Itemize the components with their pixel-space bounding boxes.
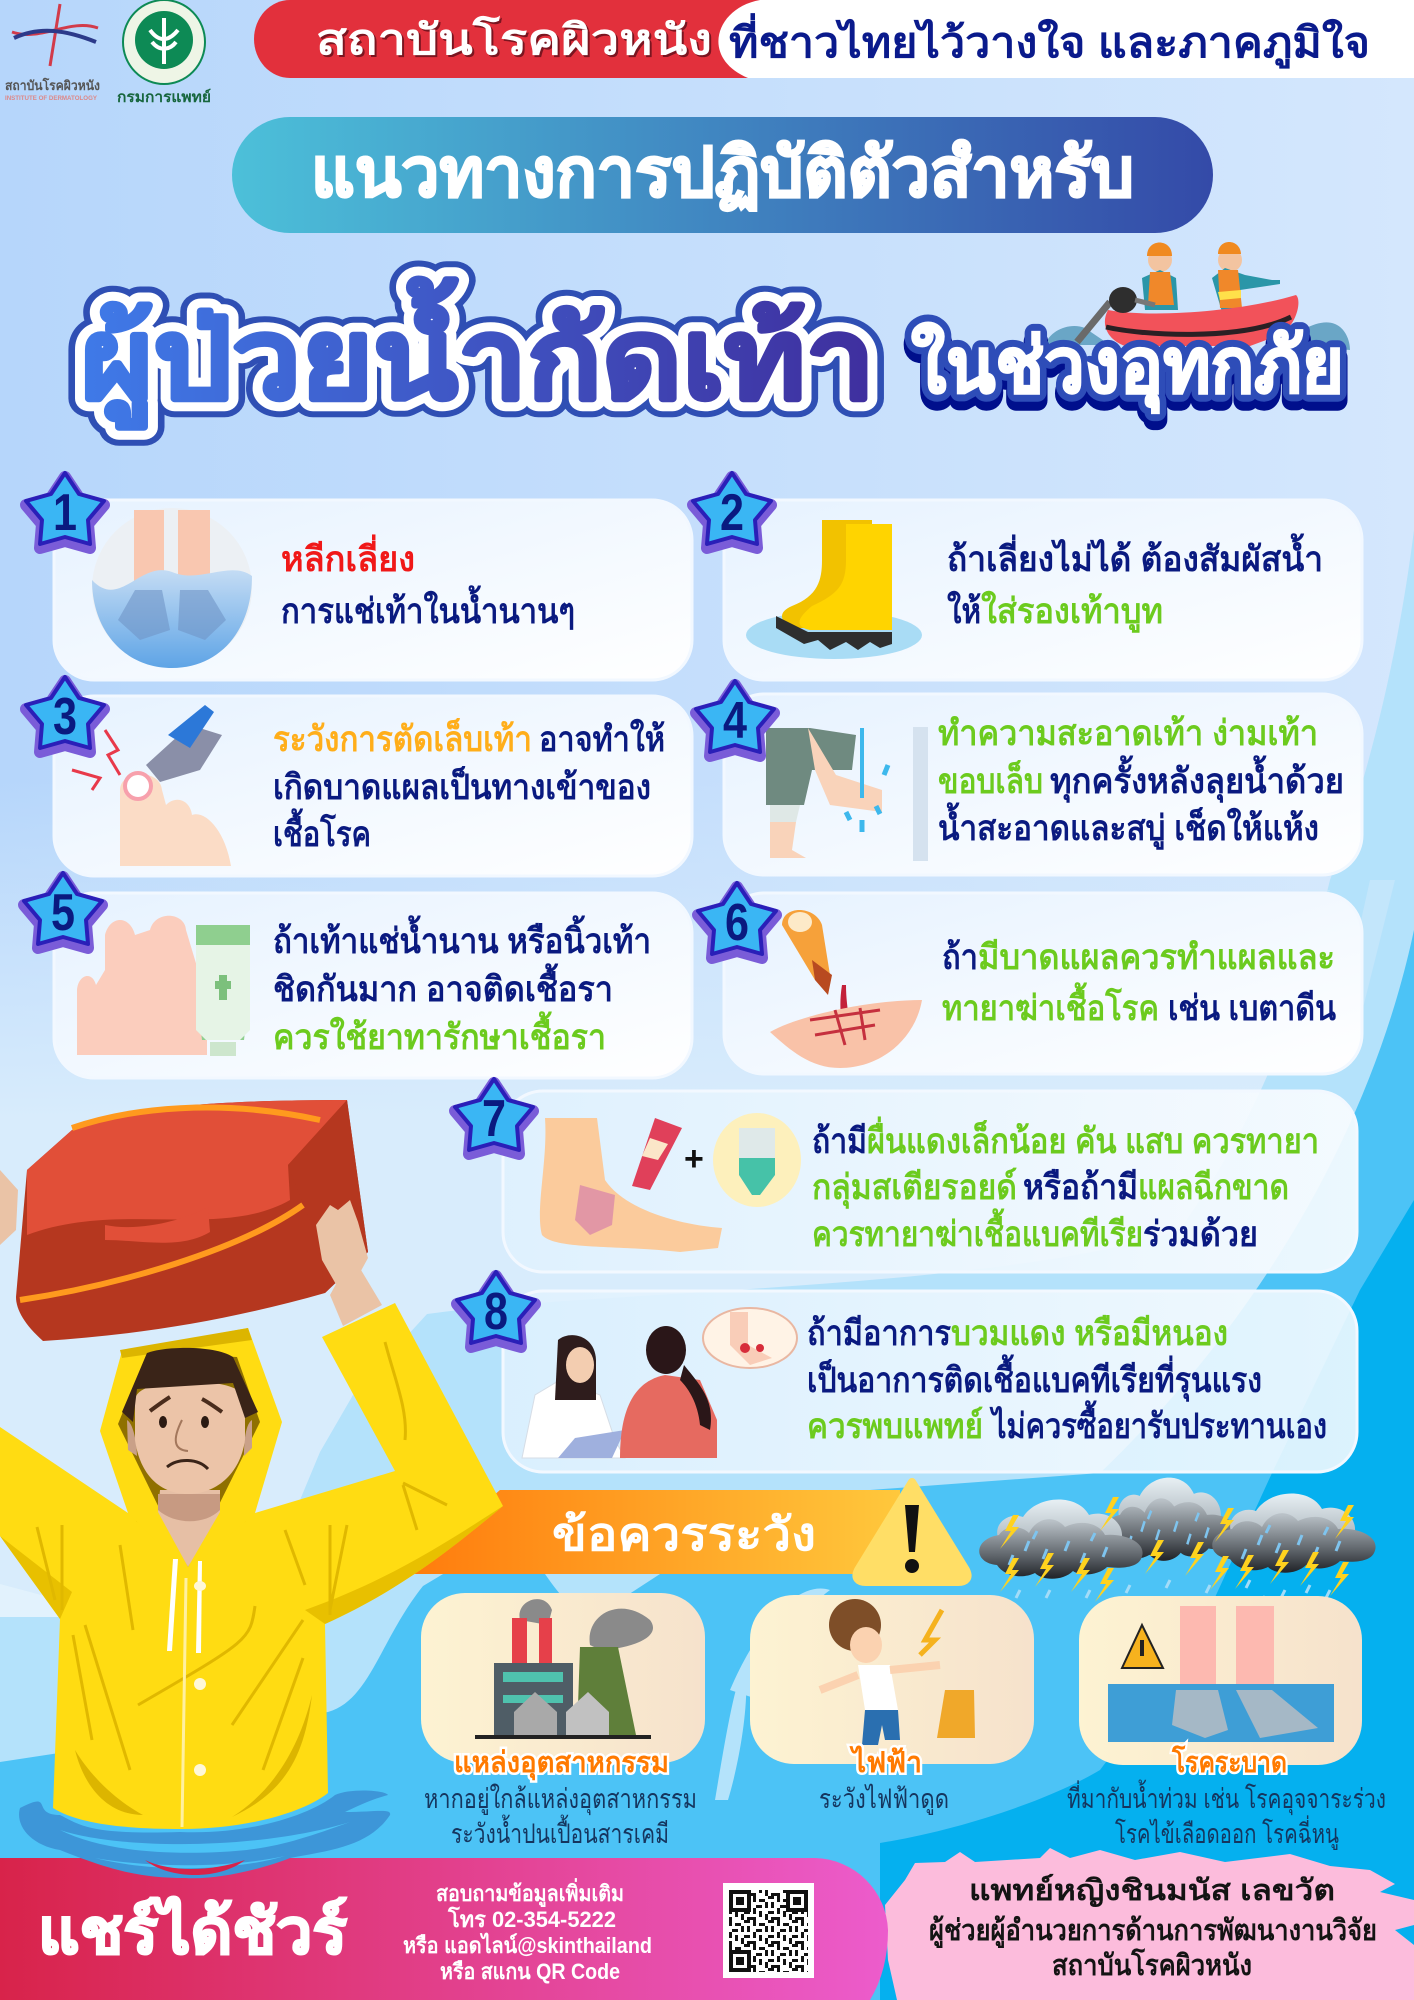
icon: betadine on wound — [770, 910, 922, 1068]
label: epidemic: โรคระบาด — [1171, 1744, 1287, 1779]
step 1 text: หลีกเลี่ยง — [281, 534, 415, 579]
red box — [16, 1100, 368, 1341]
panel: step 2: ใส่รองเท้าบูท — [981, 590, 1163, 633]
panel: step 6: มีบาดแผลควรทำแผลและ — [978, 938, 1335, 977]
panel: step 2: ให้ — [947, 590, 981, 631]
raincoat body — [0, 1303, 503, 1829]
panel: epidemic — [1067, 1596, 1386, 1850]
panel: step 7: ร่วมด้วย — [1143, 1215, 1258, 1254]
rescuer 2 — [1212, 242, 1280, 312]
panel: industrial sources — [421, 1593, 705, 1849]
icon: toes and antifungal cream — [77, 916, 250, 1056]
icon: rubber boots — [746, 520, 922, 659]
hair — [122, 1348, 258, 1422]
panel: step 4: น้ำสะอาดและสบู่ เช็ดให้แห้ง — [938, 802, 1319, 850]
main title: ผู้ป่วยน้ำกัดเท้า — [81, 277, 875, 429]
panel: electricity — [750, 1595, 1034, 1815]
star 5: 5 — [51, 884, 75, 942]
icon: doctor and patient — [522, 1308, 797, 1458]
step 5 text: ถ้าเท้าแช่น้ำนาน หรือนิ้วเท้า — [273, 915, 651, 961]
panel: step 8: เป็นอาการติดเชื้อแบคทีเรียที่รุนแรง — [807, 1354, 1262, 1402]
step 2 text: ถ้าเลี่ยงไม่ได้ ต้องสัมผัสน้ำ — [947, 533, 1323, 579]
star 2: 2 — [720, 484, 744, 542]
cloud left — [979, 1499, 1143, 1579]
panel: industrial sources: ระวังน้ำปนเปื้อนสารเคมี — [451, 1814, 669, 1849]
panel: step 8: ไม่ควรซื้อยารับประทานเอง — [989, 1400, 1327, 1446]
star 3 — [26, 677, 104, 752]
panel: step 1: การแช่เท้าในน้ำนานๆ — [281, 585, 575, 631]
footer contact: โทร 02-354-5222 — [447, 1906, 616, 1932]
footer contact: สอบถามข้อมูลเพิ่มเติม — [436, 1877, 624, 1908]
title pill — [232, 117, 1213, 233]
star 6 — [698, 883, 776, 958]
water ripples — [19, 1790, 390, 1878]
footer contact: หรือ แอดไลน์@skinthailand — [403, 1932, 652, 1958]
step 8 text: ถ้ามีอาการ — [807, 1314, 951, 1353]
star 8: 8 — [484, 1283, 508, 1341]
star 4: 4 — [723, 692, 747, 750]
icon: foot with rash and creams — [540, 1113, 801, 1252]
illustration: man in raincoat carrying box — [0, 1100, 503, 1878]
panel: step 3 — [54, 696, 692, 876]
panel: step 4: ขอบเล็บ — [938, 759, 1043, 801]
hood — [100, 1328, 282, 1572]
icon: foot with rash and creams: + — [684, 1140, 704, 1178]
QR code — [723, 1883, 814, 1978]
header institute name: สถาบันโรคผิวหนัง — [318, 17, 714, 65]
warning heading: ข้อควรระวัง — [552, 1508, 816, 1560]
header institute name: สถาบันโรคผิวหนัง — [316, 15, 712, 63]
logo: institute of dermatology: สถาบันโรคผิวหนัง — [5, 77, 100, 93]
right hand — [316, 1200, 368, 1300]
warning banner — [401, 1482, 968, 1582]
cloud centre — [1104, 1478, 1238, 1561]
star 3: 3 — [53, 688, 77, 746]
footer contact — [403, 1877, 652, 1984]
zipper strings and buttons — [167, 1559, 206, 1776]
step 3 text: ระวังการตัดเล็บเท้า — [273, 717, 532, 759]
cloud right — [1212, 1493, 1376, 1573]
raincoat shading — [0, 1342, 503, 1827]
face — [135, 1381, 245, 1494]
panel: step 5: ชิดกันมาก อาจติดเชื้อรา — [273, 963, 613, 1009]
label: electricity: ไฟฟ้า — [849, 1745, 922, 1779]
panel: step 5 — [54, 893, 692, 1078]
icon: storm clouds — [979, 1478, 1376, 1604]
lightning bolts — [1000, 1497, 1354, 1602]
panel: step 5: ควรใช้ยาทารักษาเชื้อรา — [273, 1011, 606, 1057]
hood inner — [118, 1353, 260, 1567]
icon: washing foot — [766, 727, 928, 861]
icon: toenail clipper — [72, 705, 231, 866]
panel: step 7: กลุ่มสเตียรอยด์ — [812, 1167, 1017, 1209]
main title: ผู้ป่วยน้ำกัดเท้า — [81, 277, 875, 429]
boat illustration — [1045, 242, 1350, 350]
header white tab — [718, 0, 1414, 78]
star 8 — [457, 1272, 535, 1347]
panel: step 6: เช่น เบตาดีน — [1168, 989, 1336, 1028]
description: industrial: หากอยู่ใกล้แหล่งอุตสาหกรรม — [424, 1783, 697, 1816]
star 2 — [693, 473, 771, 548]
main title: ผู้ป่วยน้ำกัดเท้า — [81, 277, 875, 429]
panel: step 7: หรือถ้ามี — [1023, 1168, 1138, 1207]
hood band under box — [120, 1328, 252, 1358]
panel: step 6 — [724, 893, 1362, 1074]
logo: department of medical services: กรมการแพทย์ — [117, 88, 211, 106]
panel: step 4: ทุกครั้งหลังลุยน้ำด้วย — [1050, 755, 1344, 803]
icon: factory — [475, 1599, 653, 1739]
star 4 — [696, 681, 774, 756]
panel: step 2 — [724, 500, 1362, 680]
panel: step 3: เชื้อโรค — [273, 808, 371, 854]
header slogan: ที่ชาวไทยไว้วางใจ และภาคภูมิใจ — [729, 13, 1370, 69]
ears — [127, 1420, 252, 1456]
header red pill — [254, 0, 760, 78]
icon: feet in flood — [1108, 1606, 1334, 1742]
panel: step 8: ควรพบแพทย์ — [807, 1406, 983, 1446]
rain — [1016, 1580, 1330, 1604]
icon: warning triangle — [856, 1482, 968, 1582]
facial features — [150, 1397, 222, 1469]
logo: institute of dermatology: INSTITUTE OF DERMATOLOGY — [5, 96, 97, 102]
star 7 — [455, 1079, 533, 1154]
subtitle: ในช่วงอุทกภัย — [911, 330, 1344, 422]
right forearm — [330, 1255, 382, 1326]
panel: step 3: อาจทำให้ — [539, 718, 665, 759]
number stars — [24, 473, 776, 1347]
panel: epidemic: โรคไข้เลือดออก โรคฉี่หนู — [1115, 1815, 1339, 1850]
rescuer 1 — [1142, 242, 1178, 310]
panel: step 7: ผื่นแดงเล็กน้อย คัน แสบ ควรทายา — [867, 1116, 1319, 1161]
inflatable boat — [1105, 295, 1298, 346]
panel: step 7: แผลฉีกขาด — [1138, 1168, 1289, 1207]
logo: institute of dermatology — [5, 4, 100, 102]
title line 1: แนวทางการปฏิบัติตัวสำหรับ — [311, 135, 1134, 211]
star 1 — [26, 473, 104, 548]
star 5 — [24, 873, 102, 948]
neck — [158, 1490, 220, 1567]
panel: step 8 — [503, 1291, 1357, 1472]
label: industrial: แหล่งอุตสาหกรรม — [454, 1747, 669, 1780]
panel: step 6: ทายาฆ่าเชื้อโรค — [942, 982, 1159, 1028]
step 6 text: ถ้า — [942, 938, 978, 977]
star 7: 7 — [482, 1090, 506, 1148]
star 6: 6 — [725, 894, 749, 952]
header banner — [254, 0, 1414, 78]
icon: feet in water — [92, 508, 252, 668]
star 1: 1 — [53, 484, 77, 542]
panel: step 8: บวมแดง หรือมีหนอง — [951, 1314, 1228, 1353]
panel: step 7: ควรทายาฆ่าเชื้อแบคทีเรีย — [812, 1208, 1143, 1254]
subtitle: ในช่วงอุทกภัย — [911, 322, 1344, 414]
panel: step 4 — [724, 694, 1362, 875]
step 4 text: ทำความสะอาดเท้า ง่ามเท้า — [938, 714, 1318, 753]
step 7 text: ถ้ามี — [812, 1122, 867, 1161]
description: electricity: ระวังไฟฟ้าดูด — [819, 1784, 949, 1815]
doctor credit panel: สถาบันโรคผิวหนัง — [1052, 1947, 1252, 1982]
footer contact: หรือ สแกน QR Code — [440, 1959, 620, 1984]
footer share slogan: แชร์ได้ชัวร์ — [38, 1896, 347, 1967]
subtitle: ในช่วงอุทกภัย — [911, 322, 1344, 414]
doctor name: แพทย์หญิงชินมนัส เลขวัต — [969, 1873, 1335, 1908]
panel: step 1 — [54, 500, 692, 680]
panel: step 7 — [503, 1091, 1357, 1272]
doctor credit panel — [885, 1848, 1414, 2000]
logo: department of medical services — [117, 0, 211, 106]
left hand — [0, 1170, 18, 1245]
icon: electric shock — [820, 1599, 975, 1745]
footer bar — [0, 1858, 888, 2000]
panel: step 3: เกิดบาดแผลเป็นทางเข้าของ — [273, 765, 651, 807]
